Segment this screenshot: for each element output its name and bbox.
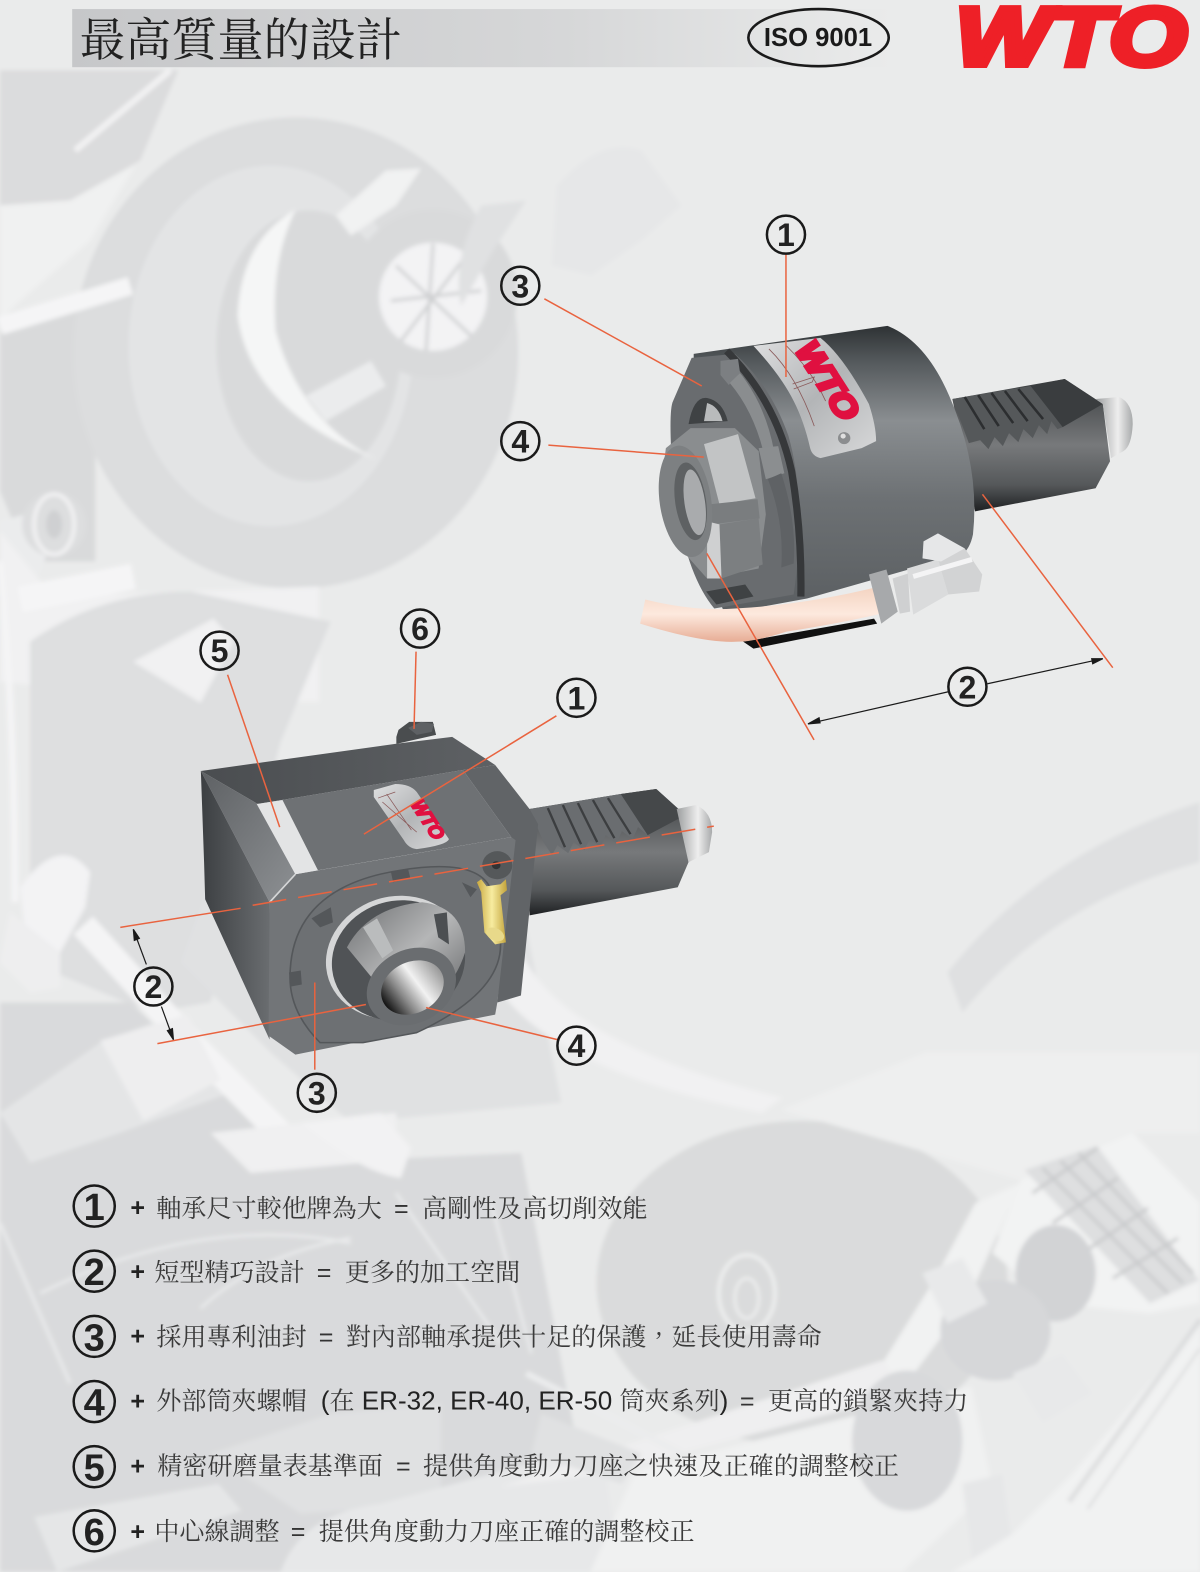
legend row 6: +: [130, 1518, 145, 1546]
callout 5: [201, 632, 239, 670]
dimension 2: top tool: [808, 659, 1103, 724]
title bar: [72, 9, 892, 67]
callout 1 lower: [557, 679, 595, 717]
legend row 3: 3: [84, 1317, 105, 1359]
top tool holder: [640, 326, 1133, 649]
air hose: [640, 587, 881, 649]
callout 1 top: 1: [777, 217, 795, 253]
left chamfer: [201, 771, 295, 902]
callout 1 top: [767, 216, 805, 254]
legend row 4: 4: [84, 1383, 105, 1425]
legend row 1: 高剛性及高切削效能: [422, 1195, 647, 1223]
legend row 5: 提供角度動力刀座之快速及正確的調整校正: [423, 1453, 899, 1481]
legend row 4: (在 ER-32, ER-40, ER-50 筒夾系列): [321, 1386, 728, 1416]
legend row 5: 精密研磨量表基準面: [157, 1453, 383, 1481]
legend row 4: +: [130, 1388, 145, 1416]
legend row 4: [74, 1381, 968, 1425]
serrated driving teeth: [530, 794, 648, 855]
nameplate: [753, 335, 876, 458]
top back chamfer: [201, 737, 495, 804]
lower tool holder: [201, 722, 712, 1055]
top flat face: [258, 770, 511, 870]
callout 3 lower: 3: [308, 1075, 326, 1111]
collet nut: [652, 428, 766, 578]
nameplate: WTO: [789, 335, 867, 427]
legend row 4: 外部筒夾螺帽: [156, 1388, 307, 1416]
callout 3 top: 3: [511, 268, 529, 304]
legend row 2: =: [317, 1259, 331, 1287]
legend row 6: 6: [84, 1512, 105, 1554]
dimension 2: lower tool: [133, 929, 173, 1040]
air fitting: [869, 533, 982, 624]
shank: [952, 379, 1110, 511]
legend row 2: 短型精巧設計: [154, 1259, 305, 1287]
nameplate: [374, 784, 449, 849]
legend row 2: [74, 1251, 520, 1294]
legend row 3: +: [130, 1322, 145, 1350]
legend row 1: [74, 1185, 647, 1229]
callout 6: 6: [411, 611, 429, 647]
legend row 5: [74, 1446, 899, 1490]
right bracket: [463, 765, 538, 1003]
ISO 9001 badge: [748, 9, 889, 66]
legend row 3: [74, 1316, 822, 1359]
legend row 3: =: [319, 1323, 333, 1351]
leader lines: lower tool: [120, 652, 714, 1070]
callout 4 lower: [557, 1027, 595, 1065]
legend row 1: +: [130, 1194, 145, 1222]
callout 3 lower: [298, 1074, 336, 1112]
callout 4 lower: 4: [568, 1028, 586, 1064]
front locking ring: [289, 867, 501, 1043]
spindle nose: [1096, 397, 1133, 458]
callout 6: [401, 610, 439, 648]
legend row 5: 5: [84, 1448, 105, 1490]
oil seal ring: [671, 351, 801, 609]
legend row 2: 更多的加工空間: [345, 1259, 520, 1287]
locating screw: [396, 722, 436, 744]
lubrication nipple: [477, 851, 512, 944]
callout 4 top: [501, 422, 539, 460]
legend row 3: 採用專利油封: [156, 1323, 307, 1351]
callout 2 top: 2: [958, 669, 976, 705]
ER collet nut: [302, 872, 489, 1043]
legend row 5: =: [396, 1453, 411, 1481]
legend row 2: +: [130, 1258, 145, 1286]
legend row 6: 提供角度動力刀座正確的調整校正: [319, 1518, 695, 1546]
legend row 5: +: [130, 1453, 145, 1481]
legend row 6: =: [291, 1518, 305, 1546]
legend row 1: 1: [84, 1187, 105, 1229]
legend row 1: =: [394, 1195, 409, 1223]
callout 2 lower: 2: [144, 969, 162, 1005]
ISO 9001 badge: ISO 9001: [764, 22, 872, 52]
legend row 6: [74, 1510, 695, 1554]
left face: [201, 771, 270, 1040]
callout 5: 5: [211, 633, 228, 669]
callout 1 lower: 1: [568, 680, 585, 716]
serrated driving teeth: [952, 386, 1063, 449]
main cylinder body: [694, 326, 974, 614]
legend row 3: 對內部軸承提供十足的保護，延長使用壽命: [346, 1323, 822, 1351]
legend row 6: 中心線調整: [154, 1518, 280, 1546]
shank: [530, 789, 688, 915]
callout 2 lower: [134, 967, 172, 1006]
ground reference strip: [257, 800, 318, 874]
front face: [269, 837, 516, 1055]
nameplate: WTO: [407, 796, 449, 843]
callout 3 top: [501, 267, 539, 305]
legend row 4: 更高的鎖緊夾持力: [768, 1388, 968, 1416]
heading: 最高質量的設計: [79, 15, 402, 66]
legend row 1: 軸承尺寸較他牌為大: [156, 1195, 382, 1223]
callout 4 top: 4: [511, 424, 529, 460]
legend row 4: =: [740, 1388, 754, 1416]
spindle nose: [677, 805, 712, 862]
callout 2 top: [948, 668, 986, 706]
legend row 2: 2: [84, 1252, 105, 1294]
leader lines: top tool: [544, 255, 1113, 740]
